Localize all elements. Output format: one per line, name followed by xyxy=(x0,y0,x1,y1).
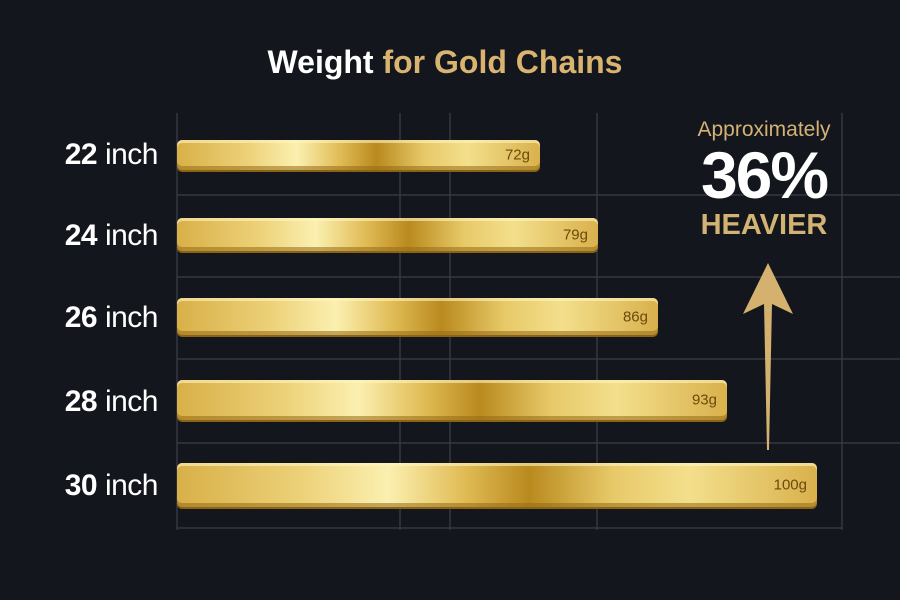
bar: 28 inch 93g xyxy=(177,380,727,420)
bar: 22 inch 72g xyxy=(177,140,540,170)
arrow: up xyxy=(743,263,793,450)
title: Weight for Gold Chains xyxy=(268,44,622,80)
bar: 24 inch 79g xyxy=(177,218,598,251)
label: 30 inch: 30 inch xyxy=(65,469,158,502)
callout: 36% heavier: HEAVIER xyxy=(701,209,827,241)
label: 24 inch: 24 inch xyxy=(65,219,158,252)
bar: 30 inch 100g xyxy=(177,463,817,507)
bar: 30 inch 100g: 100g xyxy=(774,476,807,494)
label: 28 inch: 28 inch xyxy=(65,385,158,418)
callout: 36% heavier: Approximately xyxy=(697,118,831,141)
bar: 24 inch 79g: 79g xyxy=(563,226,588,243)
bar: 26 inch 86g: 86g xyxy=(623,308,648,325)
callout: 36% heavier: 36% xyxy=(701,138,827,212)
bar: 28 inch 93g: 93g xyxy=(692,392,717,408)
label: 22 inch: 22 inch xyxy=(65,138,158,171)
label: 26 inch: 26 inch xyxy=(65,301,158,334)
callout: 36% heavier xyxy=(697,118,831,241)
bar: 22 inch 72g: 72g xyxy=(505,146,530,164)
bar: 26 inch 86g xyxy=(177,298,658,335)
